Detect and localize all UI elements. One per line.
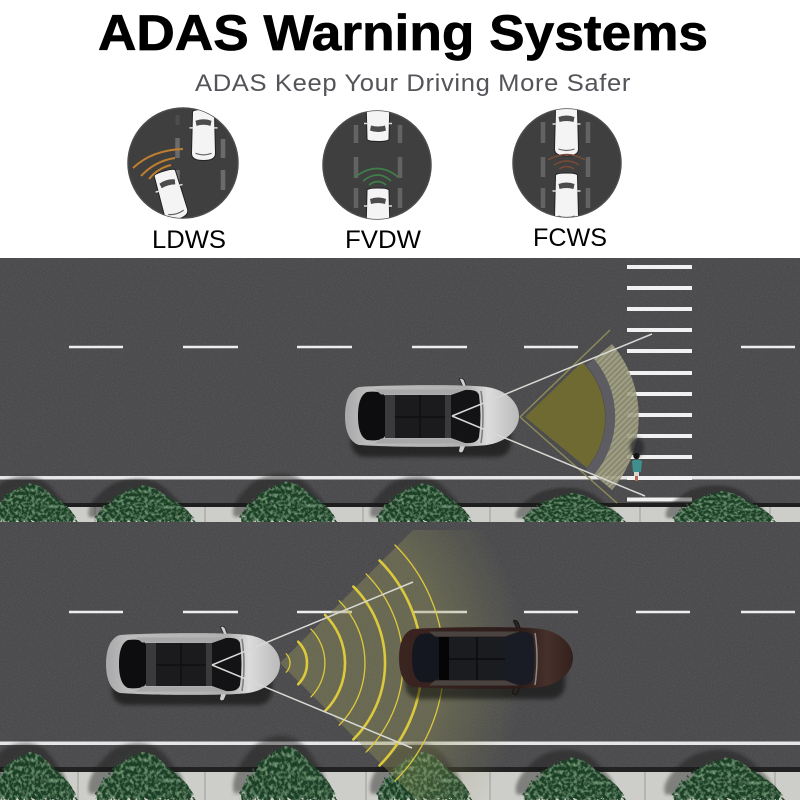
detection zone: solid olive sector (525, 362, 605, 468)
trees bottom row (0, 736, 783, 800)
detection zone: striped outer band (594, 344, 639, 490)
lane dashes top (69, 346, 795, 348)
radar arcs (286, 545, 444, 781)
lane dashes bottom (69, 611, 795, 613)
camera sight lines (452, 334, 652, 496)
panel: forward vehicle detection road scene (0, 522, 800, 800)
detection zone: grey band (586, 359, 615, 475)
car: dark brown, detected vehicle (399, 620, 573, 699)
icon: FCWS forward collision (513, 106, 621, 223)
title: ADAS Warning Systems (98, 5, 708, 61)
subtitle: ADAS Keep Your Driving More Safer (195, 70, 631, 97)
crosswalk (627, 267, 692, 500)
car: silver, bottom (106, 626, 280, 705)
sidewalk bottom (0, 767, 800, 800)
label: FVDW: FVDW (345, 226, 421, 254)
pedestrian (630, 438, 644, 481)
detection zone glow (280, 530, 560, 800)
sensor edge lines (520, 330, 617, 503)
label: LDWS: LDWS (152, 226, 226, 254)
trees top row (0, 474, 775, 522)
car: silver, top (345, 378, 519, 457)
road edge line bottom (0, 742, 800, 745)
sidewalk top (0, 503, 800, 522)
panel: forward pedestrian detection road scene (0, 258, 800, 522)
road surface top (0, 258, 800, 522)
icon: FVDW front vehicle departure (322, 110, 432, 220)
road edge line top (0, 476, 800, 480)
icon: LDWS lane departure (128, 108, 238, 223)
road surface bottom (0, 522, 800, 772)
camera sight lines bottom (212, 582, 413, 748)
label: FCWS: FCWS (533, 224, 607, 252)
